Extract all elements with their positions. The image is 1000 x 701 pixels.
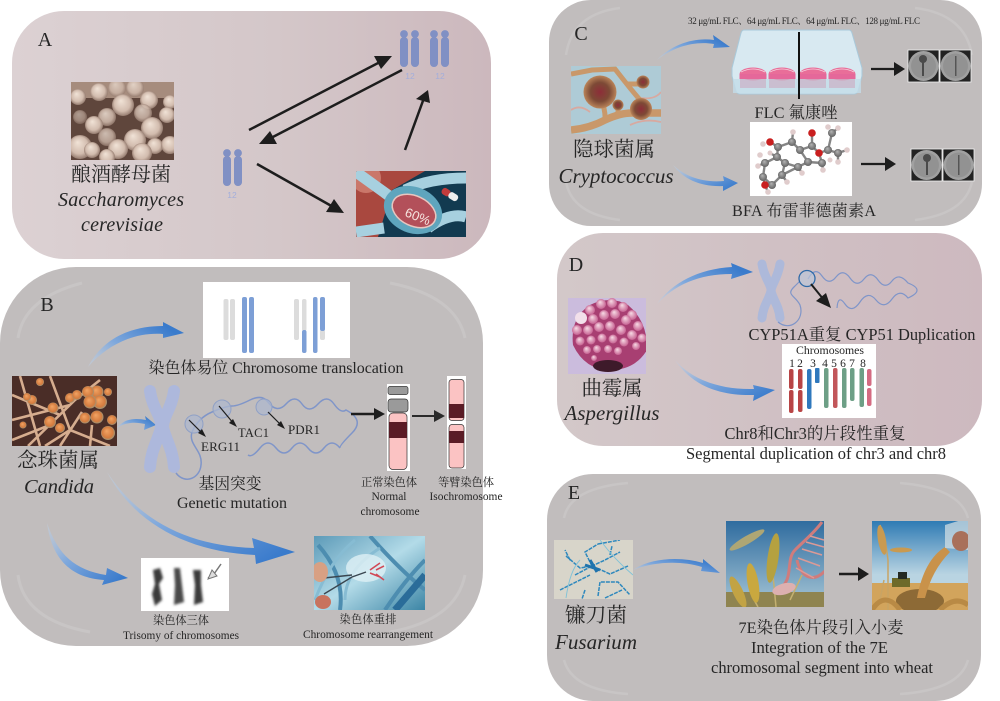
caption: segmental duplication <box>686 424 946 463</box>
arrow: to trisomy <box>47 523 128 585</box>
image: BFA plate results <box>911 149 974 181</box>
species name: Fusarium: Fusarium <box>554 630 637 654</box>
caption: chromosome rearrangement <box>303 612 434 641</box>
image: BFA molecule <box>750 122 852 196</box>
arrow: to isochromosome <box>412 410 445 422</box>
caption: BFA: BFA 布雷菲德菌素A <box>732 201 876 220</box>
species name: Cryptococcus <box>558 138 674 188</box>
image: chromosome karyotype <box>782 343 876 418</box>
arrow: to chromosome <box>117 416 156 430</box>
species name: Candida: 念珠菌属 <box>17 449 99 472</box>
caption: 7E chromosomal segment integration: chromosomal segment into wheat <box>711 658 933 677</box>
image: wheat harvest <box>872 521 968 610</box>
image: chromosome karyotype: 5 <box>831 358 837 370</box>
image: yeast cells <box>71 82 174 160</box>
arrow: to BFA <box>673 165 738 191</box>
arrow: wheat to wheat harvest <box>839 567 869 581</box>
caption: CYP51 duplication: CYP51A重复 CYP51 Duplication <box>748 325 976 344</box>
caption: normal chromosome: 正常染色体 <box>361 475 418 489</box>
species name: Candida <box>17 449 99 498</box>
label D: D <box>569 254 583 276</box>
arrow: drug treatment to duplicated <box>405 90 430 150</box>
caption: genetic mutation: Genetic mutation <box>177 495 287 512</box>
image: 60% drug exposure: 60% <box>403 205 433 228</box>
caption: normal chromosome <box>360 475 420 518</box>
image: Fusarium <box>554 540 633 599</box>
caption: isochromosome <box>430 475 502 503</box>
icon: single chromosome 12 pair: 12 <box>227 190 237 200</box>
panel E: Fusarium <box>547 474 981 701</box>
caption: 7E chromosomal segment integration: 7E染色体片段引入小麦 <box>738 618 904 637</box>
label A: A <box>38 29 53 51</box>
caption: normal chromosome: Normal <box>372 491 406 503</box>
caption: isochromosome: 等臂染色体 <box>438 475 495 489</box>
text: FLC concentrations: 32 μg/mL FLC、64 μg/mL FLC、64 μg/mL FLC、128 μg/mL FLC <box>688 16 920 26</box>
caption: trisomy <box>123 613 239 642</box>
image: chromosome karyotype: 7 <box>849 358 855 370</box>
diagram: DNA strand with gene loci <box>176 397 357 479</box>
arrow: to segmental duplication <box>675 360 775 401</box>
image: chromosome karyotype: 2 <box>797 358 803 370</box>
image: Candida cells <box>12 376 117 446</box>
label C: C <box>574 23 588 45</box>
icon: normal chromosome <box>387 384 410 471</box>
arrow: to CYP51 duplication <box>657 263 753 304</box>
caption: segmental duplication: Chr8和Chr3的片段性重复 <box>724 424 906 443</box>
image: chromosome karyotype: 1 <box>789 358 795 370</box>
icon: FLC culture plate <box>732 30 862 99</box>
species name: Fusarium: 镰刀菌 <box>565 604 627 627</box>
caption: genetic mutation: 基因突变 <box>198 475 262 493</box>
arrow: single to duplicated <box>249 56 392 130</box>
species name: Saccharomyces cerevisiae: Saccharomyces <box>58 189 184 211</box>
caption: 7E chromosomal segment integration <box>711 618 933 677</box>
arrow: BFA to result <box>861 157 896 171</box>
caption: trisomy: Trisomy of chromosomes <box>123 630 239 642</box>
species name: Candida: Candida <box>24 476 94 498</box>
image: chromosome karyotype: 8 <box>860 358 866 370</box>
image: Aspergillus <box>568 298 646 374</box>
caption: trisomy: 染色体三体 <box>153 613 209 627</box>
caption: segmental duplication: Segmental duplication of chr3 and chr8 <box>686 444 946 463</box>
arrow: FLC to result <box>871 62 905 76</box>
image: chromosome karyotype: 3 <box>810 358 816 370</box>
arrow: to wheat <box>633 559 720 573</box>
caption: chromosome translocation: 染色体易位 Chromosome translocation <box>148 359 404 377</box>
icon: X chromosome <box>150 391 174 467</box>
icon: duplicated chromosome 12 pairs: 12 <box>435 71 445 81</box>
caption: normal chromosome: chromosome <box>360 506 420 518</box>
caption: isochromosome: Isochromosome <box>430 491 502 503</box>
label E: E <box>568 482 580 504</box>
panel A: Saccharomyces cerevisiae <box>12 11 491 259</box>
image: FLC plate results <box>908 50 971 82</box>
species name: Fusarium <box>554 604 637 654</box>
caption: chromosome rearrangement: 染色体重排 <box>340 612 396 626</box>
diagram: DNA strand with gene loci: TAC1 <box>238 426 269 440</box>
icon: duplicated chromosome 12 pairs <box>400 30 449 81</box>
label B: B <box>40 294 54 316</box>
arrow: single to drug treatment <box>257 164 344 213</box>
image: chromosome karyotype: Chromosomes <box>796 343 864 357</box>
image: Cryptococcus <box>571 66 661 134</box>
caption: FLC: FLC 氟康唑 <box>754 103 838 122</box>
species name: Saccharomyces cerevisiae: 酿酒酵母菌 <box>71 163 171 186</box>
diagram: DNA strand with gene duplication <box>778 270 917 326</box>
image: trisomy karyotype <box>141 558 229 611</box>
species name: Saccharomyces cerevisiae <box>58 163 184 236</box>
species name: Cryptococcus: Cryptococcus <box>558 164 674 188</box>
panel C: Cryptococcus <box>549 0 982 226</box>
arrow: to rearrangement <box>107 472 295 564</box>
image: 60% drug exposure <box>356 171 466 237</box>
arrow: to translocation <box>88 322 184 367</box>
species name: Cryptococcus: 隐球菌属 <box>573 138 655 161</box>
icon: isochromosome <box>447 376 466 469</box>
panel D: Aspergillus <box>557 233 982 463</box>
icon: duplicated chromosome 12 pairs: 12 <box>405 71 415 81</box>
species name: Saccharomyces cerevisiae: cerevisiae <box>81 214 163 236</box>
image: chromosome karyotype: 6 <box>840 358 846 370</box>
image: wheat with DNA <box>726 521 824 607</box>
caption: chromosome rearrangement: Chromosome rearrangement <box>303 629 434 641</box>
species name: Aspergillus: Aspergillus <box>562 402 660 425</box>
image: chromosome translocation diagram <box>203 282 350 358</box>
icon: X chromosome <box>762 264 780 318</box>
arrow: to FLC <box>657 35 730 60</box>
caption: genetic mutation <box>177 475 287 512</box>
icon: single chromosome 12 pair <box>223 149 242 200</box>
arrow: to normal chromosome <box>351 408 385 420</box>
caption: 7E chromosomal segment integration: Integration of the 7E <box>751 638 888 657</box>
image: chromosome karyotype: 4 <box>822 358 828 370</box>
panel B: Candida <box>0 267 502 646</box>
species name: Aspergillus: 曲霉属 <box>582 377 642 400</box>
diagram: DNA strand with gene loci: ERG11 <box>201 439 240 454</box>
species name: Aspergillus <box>562 377 660 425</box>
image: chromosome rearrangement <box>314 536 425 610</box>
arrow: duplicated to single <box>259 70 402 144</box>
diagram: DNA strand with gene loci: PDR1 <box>288 422 320 437</box>
